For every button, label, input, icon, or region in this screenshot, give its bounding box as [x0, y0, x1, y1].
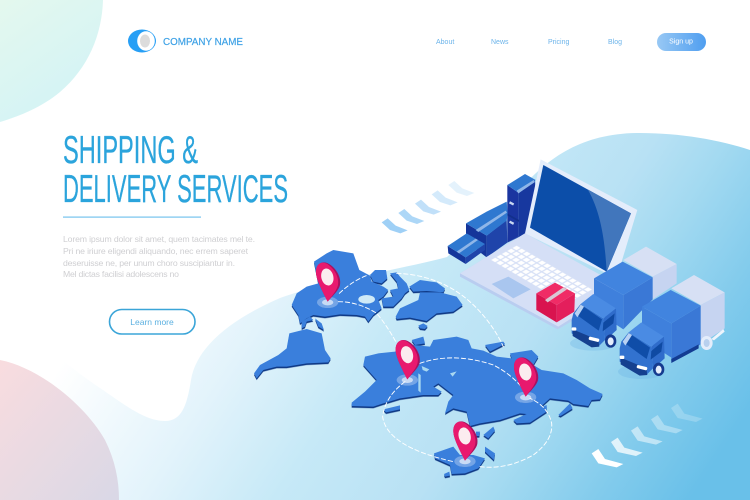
title: DELIVERY SERVICES — [63, 168, 288, 211]
body text: Mel dictas facilisi adolescens no — [63, 269, 179, 279]
parcel row: front — [448, 233, 485, 264]
title: SHIPPING & — [63, 129, 198, 172]
inland seas — [418, 366, 457, 393]
navigation links: News — [491, 39, 509, 46]
navigation links — [436, 39, 622, 46]
company name: COMPANY NAME — [163, 36, 243, 48]
logo icon — [128, 30, 156, 52]
location pin: north america — [316, 262, 340, 308]
background: mint corner blob — [0, 0, 103, 122]
american landmasses — [254, 250, 463, 378]
body text: Pri ne iriure eligendi aliquando, nec errem saperet — [63, 246, 249, 256]
upper chevron arrows — [382, 181, 474, 233]
laptop — [460, 159, 637, 329]
delivery truck: front — [618, 275, 725, 379]
hudson bay — [358, 295, 375, 304]
learn more button — [110, 310, 195, 334]
red parcel — [536, 283, 575, 322]
lower chevron arrows — [592, 404, 703, 467]
eurasia africa australia map — [352, 337, 603, 477]
title — [63, 129, 288, 211]
delivery truck: rear — [570, 247, 677, 351]
body text: Lorem ipsum dolor sit amet, quem tacimates mel te. — [63, 234, 255, 244]
stacked parcels — [448, 174, 537, 264]
sign up button: Sign up — [669, 38, 693, 46]
parcel tower — [507, 174, 537, 243]
title underline — [63, 216, 201, 218]
location pin: asia — [514, 357, 538, 403]
navigation links: About — [436, 39, 454, 46]
navigation links: Pricing — [548, 39, 570, 46]
location pin: africa — [396, 340, 420, 386]
routes and location pins — [316, 262, 552, 467]
learn more button: Learn more — [130, 317, 174, 327]
eastern landmasses — [352, 337, 603, 477]
delivery trucks — [570, 247, 725, 379]
route dashed lines — [338, 273, 552, 467]
background: pink corner blob — [0, 360, 119, 500]
parcel row: middle — [466, 202, 508, 257]
north and south america map — [254, 250, 463, 378]
navigation links: Blog — [608, 39, 622, 46]
sign up button — [657, 33, 706, 51]
location pin: australia — [453, 421, 478, 467]
background: blue wave — [0, 133, 750, 500]
body text — [63, 234, 255, 279]
body text: deseruisse ne, per unum choro suscipiantur in. — [63, 258, 235, 268]
